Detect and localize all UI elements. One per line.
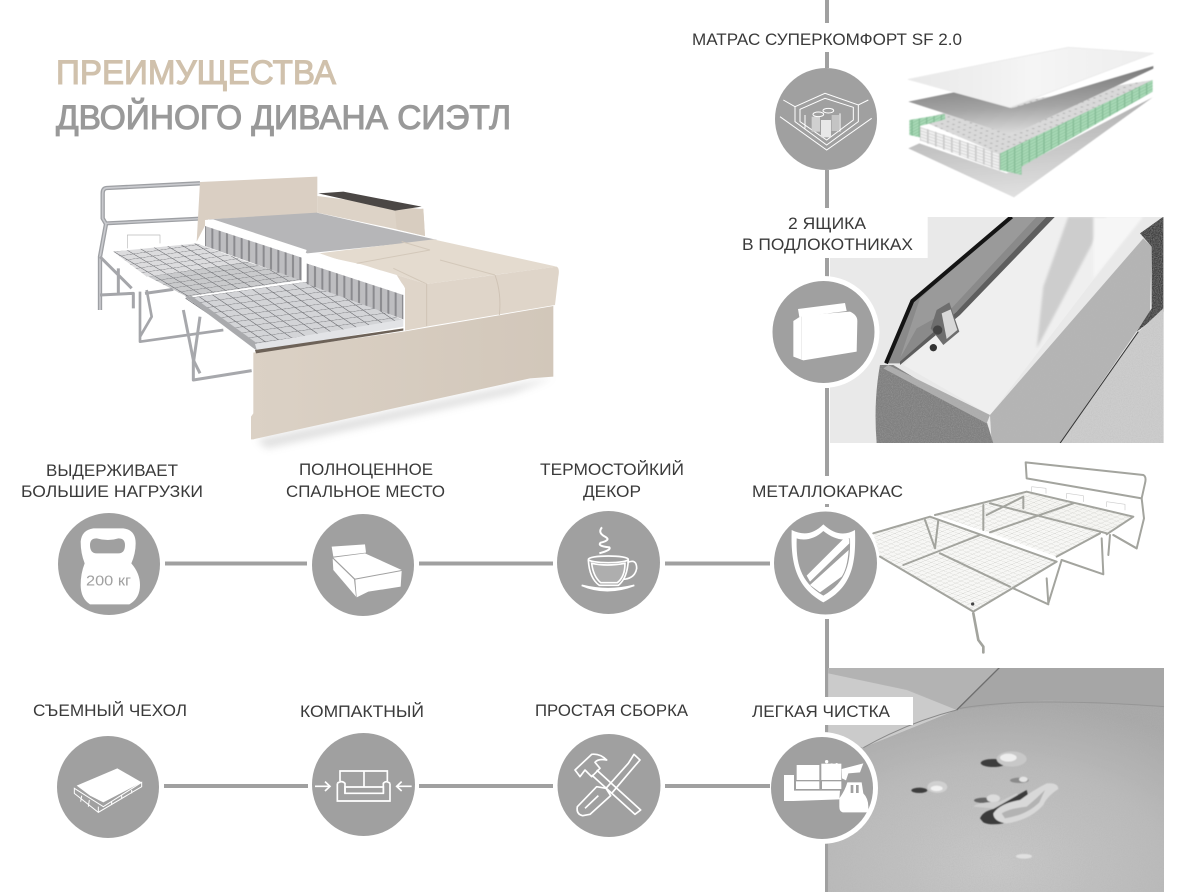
heading: mattress: МАТРАС СУПЕРКОМФОРТ SF 2.0 [692, 30, 962, 49]
icon: kettlebell 200 kg [58, 513, 160, 615]
panel: easy cleaning [745, 667, 1165, 892]
armrest [317, 196, 425, 236]
heading: armrest storage: 2 ЯЩИКА [788, 214, 867, 233]
vertical connector line [825, 0, 829, 668]
back cushion [197, 177, 317, 242]
beige seat top [313, 239, 557, 284]
icon: hammer and screwdriver [558, 734, 660, 837]
mattress cross section rear [205, 219, 307, 281]
icon: shield [774, 512, 877, 614]
label: removable cover: СЪЕМНЫЙ ЧЕХОЛ [33, 701, 187, 720]
label: high load: ВЫДЕРЖИВАЕТ [46, 461, 178, 480]
icon: kettlebell 200 kg: 200 кг [86, 573, 131, 589]
title line 2: ДВОЙНОГО ДИВАНА СИЭТЛ [56, 99, 511, 137]
front grid [185, 282, 403, 353]
item: high load [21, 461, 203, 615]
heading: armrest storage [742, 214, 913, 254]
label: easy assembly: ПРОСТАЯ СБОРКА [535, 701, 689, 720]
label: full bed [286, 460, 445, 501]
icon: mattress cover [57, 736, 159, 838]
panel: mattress [692, 30, 1153, 197]
illustration: sofa with pull-out frame [100, 177, 559, 448]
icon: cleaning spray [766, 732, 878, 844]
label: compact: КОМПАКТНЫЙ [300, 702, 424, 721]
heading: armrest storage: В ПОДЛОКОТНИКАХ [742, 235, 913, 254]
water drops [911, 751, 1058, 859]
label: full bed: ПОЛНОЦЕННОЕ [299, 460, 433, 479]
hinge [930, 302, 959, 351]
icon: coffee cup [557, 511, 660, 614]
heading background [745, 697, 913, 725]
metal headrest frame [100, 183, 223, 342]
horizontal connectors [164, 564, 770, 786]
label: full bed: СПАЛЬНОЕ МЕСТО [286, 482, 445, 501]
item: easy assembly [535, 701, 689, 837]
grey mattress top [208, 213, 437, 253]
photo: armrest storage [828, 217, 1165, 443]
label: heat resistant: ДЕКОР [583, 482, 641, 501]
photo: fabric with water drops [827, 667, 1165, 892]
seat front [397, 267, 559, 331]
icon: bed [312, 514, 414, 616]
title [56, 54, 511, 137]
heading: easy cleaning: ЛЕГКАЯ ЧИСТКА [752, 702, 891, 721]
item: removable cover [33, 701, 187, 838]
label: high load: БОЛЬШИЕ НАГРУЗКИ [21, 482, 203, 501]
heading: metal frame: МЕТАЛЛОКАРКАС [752, 482, 903, 501]
illustration: metal frame [873, 462, 1146, 652]
icon: mattress circle [775, 68, 877, 170]
item: heat resistant [540, 460, 684, 614]
panel: metal frame [752, 462, 1146, 652]
item: full bed [286, 460, 445, 616]
heading background [730, 217, 928, 258]
label: high load [21, 461, 203, 501]
title line 1: ПРЕИМУЩЕСТВА [56, 54, 336, 92]
icon: compact sofa [312, 733, 415, 836]
divider along photo [825, 668, 828, 892]
label: heat resistant: ТЕРМОСТОЙКИЙ [540, 460, 684, 479]
front folding leg [183, 310, 252, 380]
panel: armrest storage [730, 214, 1165, 443]
rear grid [113, 243, 302, 297]
item: compact [300, 702, 424, 836]
mattress cross section front [307, 253, 405, 319]
base panel [251, 306, 553, 439]
label: heat resistant [540, 460, 684, 501]
armrest top [318, 192, 422, 211]
illustration: mattress layers [908, 47, 1153, 197]
icon: armrest box [768, 276, 880, 388]
